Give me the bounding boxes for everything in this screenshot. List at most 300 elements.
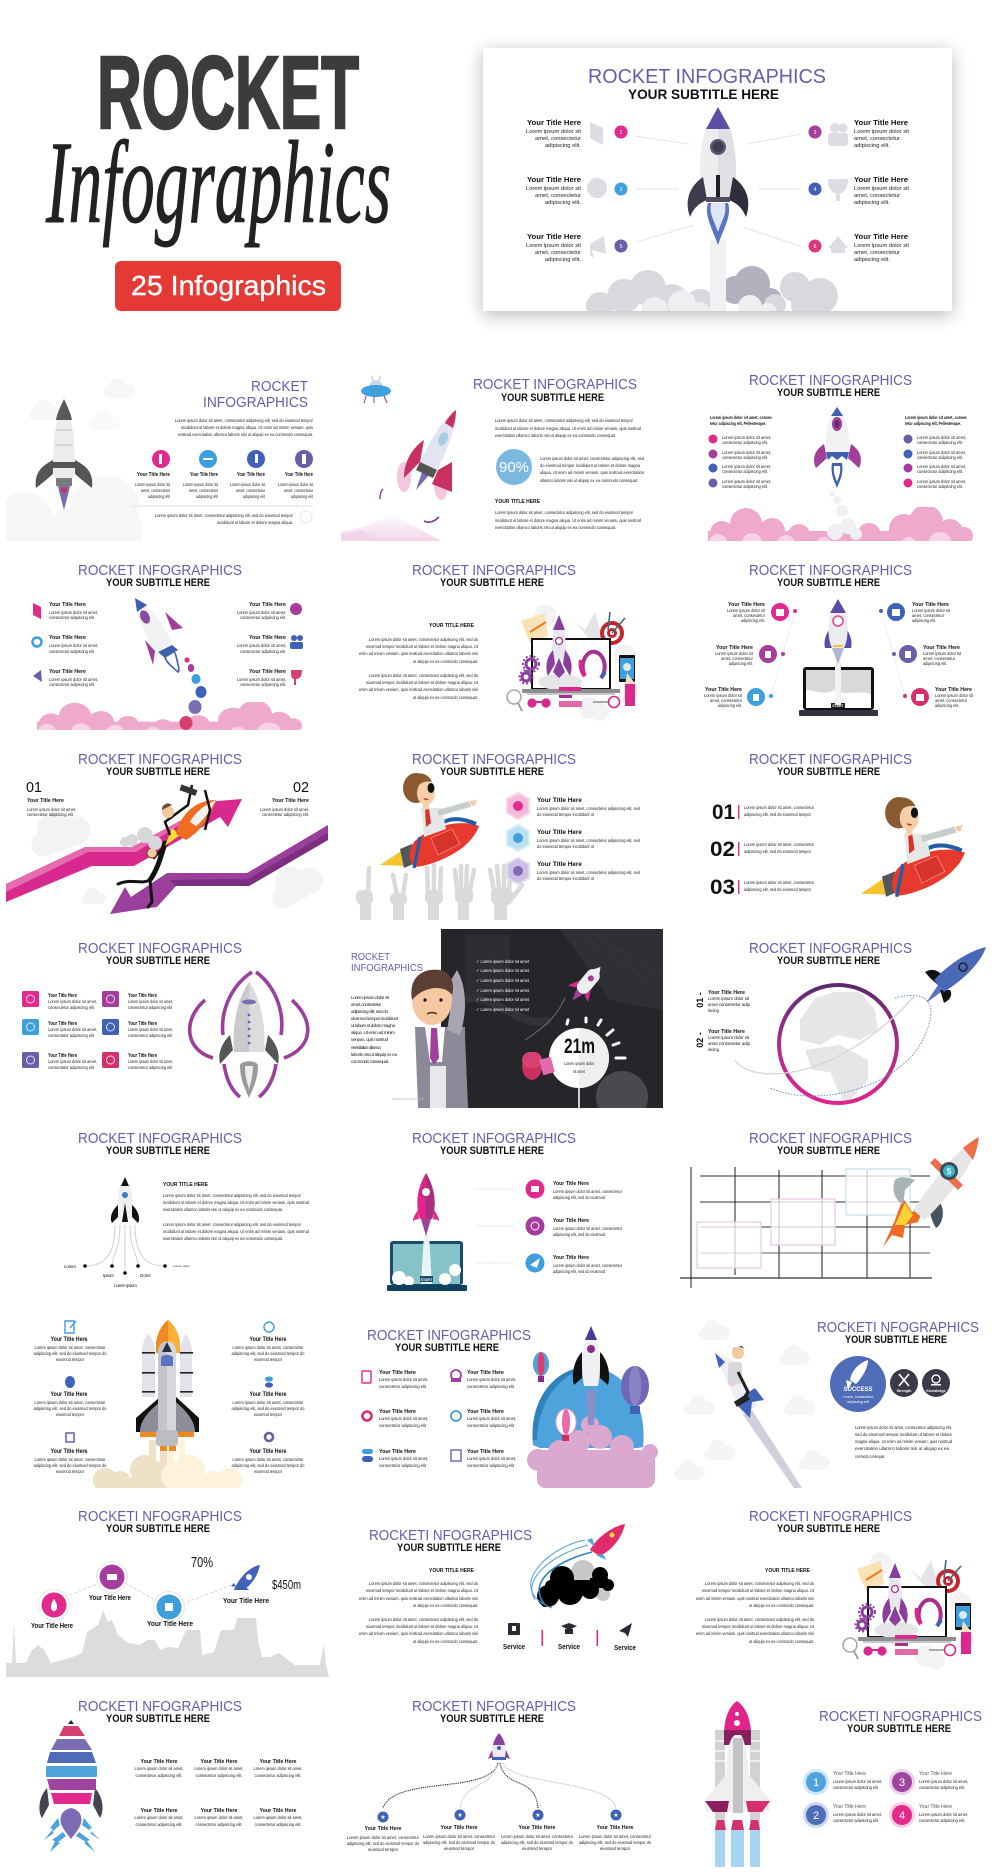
stat text: ullamco laboris nisi ut aliquip ex ea commodo consequat.	[540, 478, 638, 483]
slide 4 title: YOUR SUBTITLE HERE	[106, 577, 210, 589]
side paragraph: eiusmod tempor incididunt	[351, 1016, 399, 1021]
left text: eiusmod tempor	[56, 1357, 84, 1362]
row 02	[710, 838, 814, 861]
right text: eiusmod tempor	[254, 1412, 282, 1417]
footer note: Lorem ipsum dolor sit amet, consectetur adipiscing elit, sed do eiusmod tempor	[155, 513, 293, 518]
four columns of text: Lorem ipsum dolor sit	[278, 482, 314, 487]
bottom paragraph: YOUR TITLE HERE	[495, 499, 540, 505]
text 02: Your Title Here	[708, 1029, 745, 1035]
pink smoke	[341, 513, 442, 541]
slide 24: magenta shuttle with numbers	[705, 1701, 982, 1867]
right items: consectetur adipiscing elit.	[240, 615, 286, 620]
left text: Your Title Here	[705, 687, 742, 693]
text 01	[708, 990, 750, 1013]
white puffs	[827, 491, 862, 540]
item 2: Your Title Here	[854, 120, 908, 127]
right text: amet, consectetur	[923, 656, 955, 661]
branch text 3: eiusmod tempor	[522, 1846, 552, 1851]
slide 15 title	[749, 1130, 912, 1157]
left text: adipiscing elit, sed do eiusmod tempor do	[34, 1351, 107, 1356]
footer note	[155, 511, 312, 525]
right column text: Your Title Here	[128, 1021, 157, 1027]
left column: consectetur adipiscing elit	[379, 1423, 427, 1428]
slide 2 paragraph: Lorem ipsum dolor sit amet, consectetur adipiscing elit, sed do eiusmod tempor	[495, 418, 633, 423]
featured clouds	[586, 266, 838, 311]
item 3	[507, 858, 640, 884]
left items: Lorem ipsum dolor sit amet,	[49, 677, 98, 682]
item 5: adipiscing elit.	[545, 257, 581, 263]
item 1: adipiscing elit.	[545, 143, 581, 149]
label 02	[260, 779, 309, 817]
slide 22 title: ROCKETI NFOGRAPHICS	[78, 1698, 242, 1715]
left items: Your Title Here	[49, 669, 86, 675]
slide 21 title	[749, 1508, 912, 1535]
text blocks: Lorem ipsum dolor sit amet,	[833, 1779, 882, 1784]
circle 2: Your Title Here	[89, 1593, 131, 1602]
success circle	[830, 1356, 886, 1412]
item 1: Your Title Here	[537, 797, 582, 804]
slide 23 title: ROCKETI NFOGRAPHICS	[412, 1698, 576, 1715]
slide 21 text: ut aliquip ex ea commodo consequat.	[749, 1639, 814, 1644]
circle 1	[31, 1590, 73, 1630]
slide 18 title: ROCKETI NFOGRAPHICS	[817, 1319, 979, 1336]
row 02: Lorem ipsum dolor sit amet, consectetur	[744, 842, 814, 847]
kid on rocket	[715, 1346, 764, 1418]
left text	[34, 1336, 107, 1474]
left text: adipiscing elit.	[729, 661, 753, 666]
left items: Lorem ipsum dolor sit amet,	[49, 643, 98, 648]
text 02: Lorem ipsum dolor sit	[708, 1035, 750, 1040]
label 02: Lorem ipsum dolor sit amet,	[260, 807, 309, 812]
branch text 3	[501, 1825, 573, 1851]
left text: adipiscing elit, sed do eiusmod tempor do	[34, 1463, 107, 1468]
text row 1: consectetur adipiscing elit.	[254, 1773, 302, 1778]
slide 5 text: ut aliquip ex ea commodo consequat.	[413, 659, 478, 664]
laptop: START	[421, 1278, 433, 1282]
four columns of text: Your Title Here	[137, 472, 170, 478]
item 1: amet, consectetur	[535, 136, 581, 142]
slide 5 text: Lorem ipsum dolor sit amet, consectetur adipiscing elit, sed do	[369, 673, 478, 678]
slide 1 text	[175, 418, 314, 437]
dotted branches	[383, 1763, 616, 1808]
checklist: ✓ Lorem ipsum dolor sit amet	[476, 997, 530, 1002]
item 6: Lorem ipsum dolor sit	[854, 243, 909, 249]
number 4	[889, 1802, 915, 1828]
branch text 4: Your Title Here	[596, 1825, 634, 1831]
right text: Lorem ipsum dolor sit amet, consectetur	[232, 1457, 304, 1462]
branch dots and labels: Lorem	[64, 1264, 76, 1269]
left column: Your Title Here	[379, 1409, 416, 1415]
slide 20 text: eiusmod tempor incididunt ut labore et dolore magna aliqua. Ut	[366, 1624, 479, 1629]
slide 21 text: Lorem ipsum dolor sit amet, consectetur adipiscing elit, sed do	[705, 1581, 814, 1586]
slide 17 title: YOUR SUBTITLE HERE	[395, 1342, 499, 1354]
row 01	[712, 801, 814, 824]
left text: Your Title Here	[50, 1448, 88, 1455]
right text: adipiscing elit.	[923, 661, 947, 666]
left column text: Your Title Here	[48, 993, 77, 999]
orbit lines	[735, 995, 931, 1096]
slide 13 title: YOUR SUBTITLE HERE	[106, 1145, 210, 1157]
service 3	[614, 1623, 636, 1652]
four columns of text: Lorem ipsum dolor sit	[230, 482, 266, 487]
slide 10 title	[78, 940, 242, 967]
left text: Lorem ipsum dolor sit amet, consectetur	[34, 1400, 106, 1405]
boy riding rocket	[380, 773, 479, 868]
branch text 2: adipiscing elit, sed do eiusmod tempor do	[423, 1840, 495, 1845]
slide 5 text: ut aliquip ex ea commodo consequat.	[413, 695, 478, 700]
right top text: Lorem ipsum dolor sit amet, consec	[905, 415, 967, 421]
slide 21 text	[696, 1568, 815, 1644]
stat text: aliqua. Ut enim ad minim veniam, quis nostrud exercitation	[540, 470, 644, 475]
right items: consectetur adipiscing elit.	[240, 649, 286, 654]
left text: Your Title Here	[50, 1336, 88, 1343]
icon circles	[152, 450, 313, 468]
item 6: amet, consectetur	[854, 250, 900, 256]
success circle: Lorem, consectetur	[843, 1395, 874, 1399]
item 4: amet, consectetur	[854, 193, 900, 199]
left column text: Lorem ipsum dolor sit amet,	[48, 1059, 97, 1064]
left text	[704, 602, 766, 708]
vertical label 01: 01 -	[695, 992, 705, 1008]
right text: adipiscing elit, sed do eiusmod tempor do	[232, 1406, 305, 1411]
item 6: adipiscing elit.	[854, 257, 890, 263]
slide 20 text	[359, 1568, 479, 1644]
branch dots and labels: Lorem dolor	[173, 1264, 190, 1268]
slide 13 text: Lorem ipsum dolor sit amet, consectetur adipiscing elit, sed do eiusmod tempor	[163, 1222, 301, 1227]
right text: Your Title Here	[935, 687, 972, 693]
smoke trail	[743, 1410, 802, 1488]
branch text 1: adipiscing elit, sed do eiusmod tempor do	[347, 1841, 419, 1846]
orange rocket: $	[947, 1167, 952, 1176]
slide 5 text: eiusmod tempor incididunt ut labore et dolore magna aliqua. Ut	[366, 644, 479, 649]
left column text: Lorem ipsum dolor sit amet,	[48, 1027, 97, 1032]
slide 1: white rocket with icons	[33, 381, 313, 525]
featured rocket	[688, 107, 748, 311]
slide 17 title	[367, 1327, 531, 1354]
branch text 4: adipiscing elit, sed do eiusmod tempor do	[579, 1840, 651, 1845]
slide 23: branching tree	[347, 1698, 651, 1852]
right text: Your Title Here	[250, 1336, 287, 1343]
item 1: 1	[620, 130, 623, 136]
slide 5 text: Lorem ipsum dolor sit amet, consectetur adipiscing elit, sed do	[369, 637, 478, 642]
right text: Lorem ipsum dolor sit amet, consectetur	[232, 1345, 304, 1350]
text 01: Your Title Here	[708, 990, 745, 996]
label 02: 02	[293, 779, 309, 796]
laptop: START	[832, 704, 845, 708]
slide 17: balloons and blue dome	[362, 1326, 658, 1488]
pink rising arrow	[6, 799, 242, 902]
item 3: Your Title Here	[537, 861, 582, 868]
slide 20 text: ut aliquip ex ea commodo consequat.	[413, 1639, 478, 1644]
right list: Lorem ipsum dolor sit amet,	[917, 479, 966, 484]
left text: adipiscing elit.	[741, 618, 765, 623]
dashed connections	[65, 1583, 232, 1604]
slide 9: numbered list with boy on rocket	[710, 751, 965, 899]
item 2: adipiscing elit.	[854, 143, 890, 149]
slide 1 text: Lorem ipsum dolor sit amet, consectetur adipiscing elit, sed do eiusmod tempor	[175, 418, 313, 423]
slide 21: marketing laptop repeat	[696, 1508, 973, 1669]
row 03	[710, 876, 814, 899]
balloons	[533, 1352, 649, 1441]
globe	[779, 985, 897, 1105]
slide 18 title	[817, 1319, 979, 1346]
item 3: adipiscing elit.	[545, 200, 581, 206]
text 01: Lorem ipsum dolor sit	[708, 996, 750, 1001]
exhaust clouds	[93, 1440, 242, 1488]
right items	[237, 602, 303, 687]
item 5: 5	[620, 244, 623, 250]
climbing man	[118, 838, 172, 907]
slide 3 title: YOUR SUBTITLE HERE	[777, 387, 880, 399]
text blocks: Your Title Here	[919, 1804, 952, 1810]
item 2: Lorem ipsum dolor sit amet, consectetur	[553, 1226, 622, 1231]
left items: Lorem ipsum dolor sit amet,	[49, 610, 98, 615]
side paragraph: ut labore et dolore magna	[351, 1023, 395, 1028]
right text: Your Title Here	[912, 602, 949, 608]
right column: Your Title Here	[467, 1449, 504, 1455]
service 2: Service	[558, 1644, 580, 1651]
colored icon tiles	[22, 991, 119, 1068]
left column text: Lorem ipsum dolor sit amet,	[48, 999, 97, 1004]
star nodes: ★	[613, 1812, 619, 1819]
magenta rocket	[413, 1173, 439, 1236]
slide 1 text: nostrud exercitation ullamco laboris nisi ut aliquip ex ea commodo consequat.	[178, 432, 313, 437]
item 2	[507, 825, 640, 851]
right list: consectetur adipiscing elit.	[917, 469, 963, 474]
small rocket	[111, 1177, 139, 1223]
text blocks: consectetur adipiscing elit.	[919, 1785, 965, 1790]
text blocks: consectetur adipiscing elit.	[919, 1818, 965, 1823]
label 01	[26, 779, 76, 817]
pale clouds	[674, 1320, 830, 1480]
orange rocket	[883, 1137, 979, 1247]
service 2	[558, 1623, 580, 1651]
$450m stat: $450m	[272, 1577, 301, 1592]
right text	[232, 1336, 305, 1474]
text 02: iscing	[708, 1047, 719, 1052]
dashes	[476, 1189, 515, 1263]
four columns of text: Your Title Here	[285, 472, 313, 478]
left items: consectetur adipiscing elit.	[49, 682, 95, 687]
slide 22 title	[78, 1698, 242, 1725]
black cloud	[537, 1560, 614, 1607]
slide 6 title: YOUR SUBTITLE HERE	[777, 577, 880, 589]
item 1	[507, 793, 640, 819]
branch text 1: Your Title Here	[364, 1826, 402, 1832]
right column: consectetur adipiscing elit	[467, 1463, 515, 1468]
main title: Infographics script: Infographics	[45, 117, 391, 248]
item 5	[526, 234, 628, 263]
laptop	[799, 667, 878, 716]
purple rings	[190, 972, 308, 1097]
side title: ROCKET	[351, 952, 390, 963]
branch text 4: eiusmod tempor	[600, 1846, 630, 1851]
text row 1: Your Title Here	[260, 1759, 296, 1765]
left items: Your Title Here	[49, 635, 86, 641]
text blocks: Lorem ipsum dolor sit amet,	[833, 1812, 882, 1817]
badge: 25 Infographics: 25 Infographics	[131, 270, 326, 301]
grid lines	[680, 1167, 932, 1288]
left column text: Your Title Here	[48, 1021, 77, 1027]
slide 22: striped rocket	[39, 1698, 302, 1852]
circle 3: Your Title Here	[147, 1619, 193, 1628]
right text: eiusmod tempor	[254, 1469, 282, 1474]
marketing illustration	[843, 1552, 973, 1669]
text blocks: Lorem ipsum dolor sit amet,	[919, 1779, 968, 1784]
number 3	[889, 1769, 915, 1795]
left text: amet, consectetur	[733, 613, 765, 618]
item 4: Lorem ipsum dolor sit	[854, 186, 909, 192]
tilted rocket	[380, 410, 456, 522]
slide 5 text: enim ad minim veniam, quis nostrud exercitation ullamco laboris nisi	[359, 651, 478, 656]
90% stat: 90%	[499, 459, 529, 476]
item 4	[808, 177, 909, 206]
bottom paragraph: incididunt ut labore et dolore magna aliqua. Ut enim ad minim veniam, quis nostrud	[495, 518, 641, 523]
left column: Lorem ipsum dolor sit amet,	[379, 1416, 428, 1421]
circle 1: Your Title Here	[31, 1621, 73, 1630]
four columns of text: Lorem ipsum dolor sit	[183, 482, 219, 487]
slide 12 title: YOUR SUBTITLE HERE	[777, 955, 880, 967]
four columns of text: adipiscing elit	[148, 494, 171, 499]
panel: featured slide	[483, 48, 952, 323]
side title	[351, 952, 423, 974]
slide 5 text	[359, 623, 479, 700]
slide 14: magenta rocket from laptop	[387, 1130, 622, 1291]
slide 10 title: YOUR SUBTITLE HERE	[106, 955, 210, 967]
shuttle	[136, 1320, 199, 1451]
number 2: 2	[813, 1810, 819, 1822]
number 2	[803, 1802, 829, 1828]
slide 20: pink rocket with black cloud	[359, 1524, 636, 1652]
circle 2	[89, 1562, 131, 1602]
circle 3	[147, 1592, 193, 1628]
item 6: Your Title Here	[854, 234, 908, 241]
stat text: do eiusmod tempor incididunt ut labore et dolore magna	[540, 463, 640, 468]
slide 19 title: ROCKETI NFOGRAPHICS	[78, 1508, 242, 1525]
four columns of text	[135, 472, 314, 499]
right column text: consectetur adipiscing elit	[128, 1065, 173, 1070]
left column: Lorem ipsum dolor sit amet,	[379, 1377, 428, 1382]
label 01: consectetur adipiscing elit.	[27, 812, 74, 817]
row 03: 03	[710, 876, 735, 899]
slide 24 title	[819, 1708, 982, 1735]
slide 12 title: ROCKET INFOGRAPHICS	[749, 940, 912, 957]
slide 22 title: YOUR SUBTITLE HERE	[106, 1713, 210, 1725]
text row 1: consectetur adipiscing elit.	[196, 1773, 242, 1778]
rocket	[814, 407, 861, 488]
slide 16: space shuttle	[34, 1320, 305, 1493]
slide 20 title: ROCKETI NFOGRAPHICS	[369, 1527, 532, 1544]
blue streams	[531, 1540, 592, 1608]
right top text	[905, 415, 967, 427]
left items	[32, 602, 98, 687]
branch text 3: Lorem ipsum dolor sit amet, consectetur	[501, 1834, 573, 1839]
marketing illustration	[507, 604, 637, 721]
row 03: adipiscing elit, sed do eiusmod tempor	[744, 887, 811, 892]
left text: eiusmod tempor	[56, 1469, 84, 1474]
right items: Your Title Here	[249, 635, 286, 641]
slide 7: arrows and business people	[6, 751, 328, 914]
four columns of text: adipiscing elit	[291, 494, 314, 499]
label 01: Lorem ipsum dolor sit amet,	[27, 807, 76, 812]
white rocket	[36, 399, 92, 510]
left column: Your Title Here	[379, 1370, 416, 1376]
right items: consectetur adipiscing elit.	[240, 682, 286, 687]
right list: consectetur adipiscing elit.	[917, 440, 963, 445]
right text: Your Title Here	[923, 645, 960, 651]
slide 13 title	[78, 1130, 242, 1157]
left text: adipiscing elit.	[718, 703, 742, 708]
grey rocket	[219, 982, 279, 1098]
right text: Lorem ipsum dolor sit	[935, 693, 974, 698]
four columns of text: Your Title Here	[190, 472, 218, 478]
item 2: Your Title Here	[553, 1218, 589, 1224]
text 01: amet consectetur adip	[708, 1002, 750, 1007]
slide 18 text: exercitation ullamco laboris nisi ut aliquip ex ea	[855, 1446, 949, 1451]
slide 18 text: magna aliqua. Ut enim ad minim veniam, quis nostrud	[855, 1439, 952, 1444]
row 02: adipiscing elit, sed do eiusmod tempor	[744, 849, 811, 854]
left circles	[747, 603, 797, 706]
slide 13 text: Lorem ipsum dolor sit amet, consectetur adipiscing elit, sed do eiusmod tempor	[163, 1193, 301, 1198]
branch text 2: Your Title Here	[440, 1825, 478, 1831]
checklist: ✓ Lorem ipsum dolor sit amet	[476, 978, 530, 983]
knowledge circle: Knowledge	[926, 1389, 946, 1393]
item 2: do eiusmod tempor incididunt ut	[537, 844, 595, 849]
slide 5: marketing laptop	[359, 562, 637, 721]
slide 13 text: incididunt ut labore et dolore magna aliqua. Ut enim ad minim veniam, quis nostrud	[163, 1200, 309, 1205]
right top text: tetur adipiscing elit, Pellentesque.	[905, 421, 961, 427]
left list: consectetur adipiscing elit.	[722, 440, 768, 445]
dome and cloud	[527, 1367, 658, 1488]
slide 20 text: Lorem ipsum dolor sit amet, consectetur adipiscing elit, sed do	[369, 1617, 478, 1622]
left column text: consectetur adipiscing elit	[48, 1033, 95, 1038]
text row 2: Lorem ipsum dolor sit amet,	[134, 1815, 184, 1820]
slide 13 text: YOUR TITLE HERE	[163, 1182, 208, 1188]
right list: Lorem ipsum dolor sit amet,	[917, 435, 966, 440]
branch dots and labels	[64, 1264, 190, 1288]
four columns of text: Lorem ipsum dolor sit	[135, 482, 171, 487]
left icons	[65, 1321, 76, 1442]
slide 20 title	[369, 1527, 532, 1554]
slide 17 title: ROCKET INFOGRAPHICS	[367, 1327, 531, 1344]
slide 10 title: ROCKET INFOGRAPHICS	[78, 940, 242, 957]
four columns of text: Your Title Here	[237, 472, 265, 478]
left list	[708, 434, 771, 489]
bottom paragraph: Lorem ipsum dolor sit amet, consectetur adipiscing elit, sed do eiusmod tempor	[495, 510, 633, 515]
text blocks	[833, 1771, 968, 1823]
slide 6 title	[749, 562, 912, 589]
right column text: Lorem ipsum dolor sit amet,	[128, 1027, 173, 1032]
success circle: adipiscing elit	[847, 1400, 869, 1404]
slide 21 text: eiusmod tempor incididunt ut labore et dolore magna aliqua. Ut	[702, 1624, 815, 1629]
number 1: 1	[813, 1777, 819, 1789]
left items: Your Title Here	[49, 602, 86, 608]
slide 20 text: ut aliquip ex ea commodo consequat.	[413, 1603, 478, 1608]
star nodes: ★	[380, 1814, 386, 1821]
left list: Lorem ipsum dolor sit amet,	[722, 479, 771, 484]
slide 5 text: YOUR TITLE HERE	[429, 623, 474, 629]
slide 13 text: incididunt ut labore et dolore magna aliqua. Ut enim ad minim veniam, quis nostrud	[163, 1229, 309, 1234]
21m timer: sit amet	[573, 1069, 586, 1074]
slide 2 paragraph	[495, 418, 641, 438]
item 3: Lorem ipsum dolor sit amet, consectetur	[553, 1263, 622, 1268]
text blocks: consectetur adipiscing elit.	[833, 1818, 879, 1823]
item 3: 3	[620, 187, 623, 193]
right column: Lorem ipsum dolor sit amet,	[467, 1377, 516, 1382]
left list: Lorem ipsum dolor sit amet,	[722, 464, 771, 469]
item 3: amet, consectetur	[535, 193, 581, 199]
right column	[451, 1370, 516, 1468]
